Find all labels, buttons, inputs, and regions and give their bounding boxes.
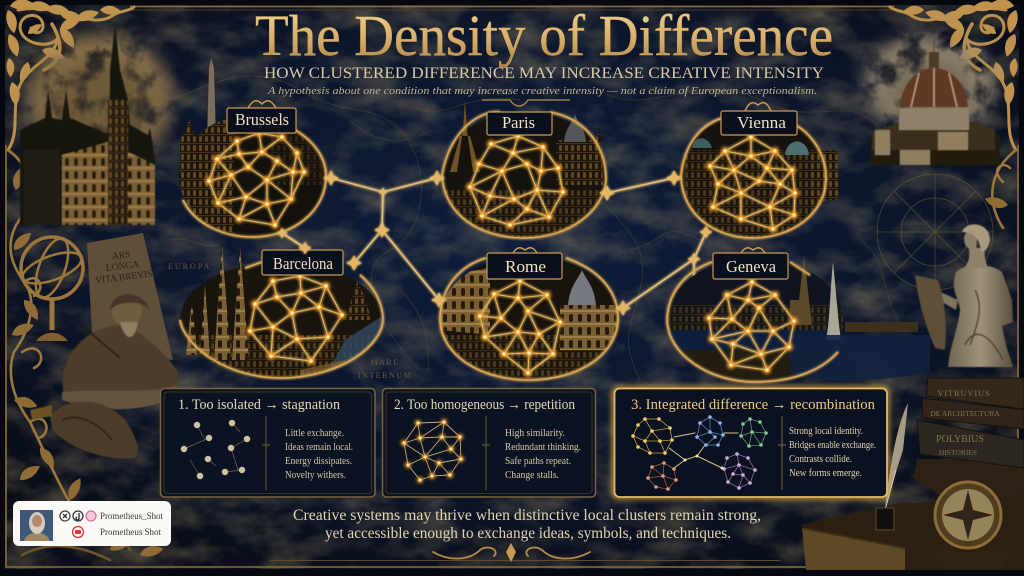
blue cluster (697, 417, 723, 445)
homogeneous network (404, 422, 461, 480)
parchment inscription: LONGA (105, 260, 140, 274)
illustration: Ars Longa parchment (87, 233, 173, 360)
illustration: armillary sphere (19, 234, 85, 341)
cluster: Paris (442, 100, 606, 240)
Brussels label (227, 101, 296, 133)
purple cluster (724, 454, 755, 488)
social handles: Prometheus Shot (100, 527, 161, 537)
avatar (20, 510, 53, 541)
text: homogeneous effects: Change stalls. (505, 469, 559, 481)
map label: Europa: EUROPA (168, 262, 211, 271)
text: integrated effects: Contrasts collide. (789, 453, 852, 465)
Geneva label: Geneva (726, 257, 776, 276)
red cluster (648, 463, 676, 489)
book spine titles: VITRUVIUS (937, 388, 991, 398)
Barcelona network (250, 276, 342, 361)
illustration: star chart (877, 174, 993, 290)
Paris label (482, 100, 570, 135)
illustration: open book, ink and quill (800, 403, 1024, 570)
Brussels network (209, 133, 304, 225)
recombination network (633, 417, 766, 489)
social credit card (13, 501, 171, 546)
heading: integrated difference: 3. Integrated difference → recombination (631, 397, 875, 413)
parchment inscription: ARS (111, 250, 131, 262)
subtitle: HOW CLUSTERED DIFFERENCE MAY INCREASE CREATIVE INTENSITY (264, 65, 824, 82)
heading: too isolated: 1. Too isolated → stagnation (178, 397, 340, 413)
text: isolated effects: Little exchange. (285, 427, 344, 439)
parchment inscription: VITA BREVIS (95, 269, 153, 286)
map label: Mare Internum: INTERNUM (358, 371, 412, 380)
heading: too homogeneous: 2. Too homogeneous → repetition (394, 397, 575, 413)
Paris network (470, 136, 563, 225)
closing statement: yet accessible enough to exchange ideas, symbols, and techniques. (325, 525, 731, 542)
panel: too isolated (160, 388, 375, 497)
text: integrated effects: Bridges enable exchange. (789, 439, 876, 451)
map label: Mare Internum: MARE (370, 358, 400, 367)
yellow cluster (633, 419, 672, 453)
illustration: rolled map (30, 402, 138, 459)
book spine titles: DE ARCHITECTURA (930, 409, 1000, 418)
title: The Density of Difference (255, 3, 833, 68)
Barcelona label: Barcelona (273, 254, 333, 273)
book spine titles: HISTORIES (939, 448, 977, 457)
Rome label: Rome (505, 257, 546, 276)
cluster: Geneva (667, 248, 930, 383)
illustration: statue with scroll (915, 224, 1013, 367)
cluster: Rome (440, 248, 618, 381)
text: isolated effects: Energy dissipates. (285, 455, 352, 467)
text: integrated effects: New forms emerge. (789, 467, 862, 479)
illustration: scholar writing (62, 294, 178, 409)
Vienna label (721, 103, 797, 135)
illustration: brass compass (925, 482, 1012, 570)
closing statement: Creative systems may thrive when distinctive local clusters remain strong, (293, 507, 761, 524)
illustration: Brussels town hall (20, 25, 170, 225)
illustration: stacked books (913, 378, 1024, 502)
text: integrated effects: Strong local identity. (789, 425, 863, 437)
text: homogeneous effects: High similarity. (505, 427, 565, 439)
isolated nodes (184, 423, 247, 476)
bridge connectors (277, 170, 712, 316)
social icons (60, 511, 96, 538)
illustration: Florence dome (866, 35, 1000, 165)
bottom flourish (270, 543, 780, 562)
text: isolated effects: Novelty withers. (285, 469, 346, 481)
Paris label: Paris (502, 113, 535, 132)
cluster: Barcelona (180, 246, 384, 380)
green cluster (741, 419, 766, 446)
social handles: Prometheus_Shot (100, 511, 163, 521)
panel: integrated difference (614, 388, 887, 497)
Barcelona label (262, 250, 343, 275)
Geneva network (709, 282, 794, 370)
text: homogeneous effects: Safe paths repeat. (505, 455, 571, 467)
cluster: Vienna (680, 103, 838, 240)
Rome label (487, 248, 562, 279)
cluster: Brussels (179, 58, 327, 240)
book spine titles: POLYBIUS (936, 434, 984, 445)
Brussels label: Brussels (235, 110, 289, 129)
Geneva label (713, 248, 788, 279)
bridges between clusters (282, 178, 706, 323)
hypothesis note: A hypothesis about one condition that may increase creative intensity — not a claim of European exceptionalism. (267, 85, 817, 97)
panel: too homogeneous (382, 388, 596, 497)
text: isolated effects: Ideas remain local. (285, 441, 353, 453)
text: homogeneous effects: Redundant thinking. (505, 441, 581, 453)
Vienna network (710, 137, 795, 229)
Vienna label: Vienna (737, 113, 786, 132)
Rome network (480, 281, 560, 373)
